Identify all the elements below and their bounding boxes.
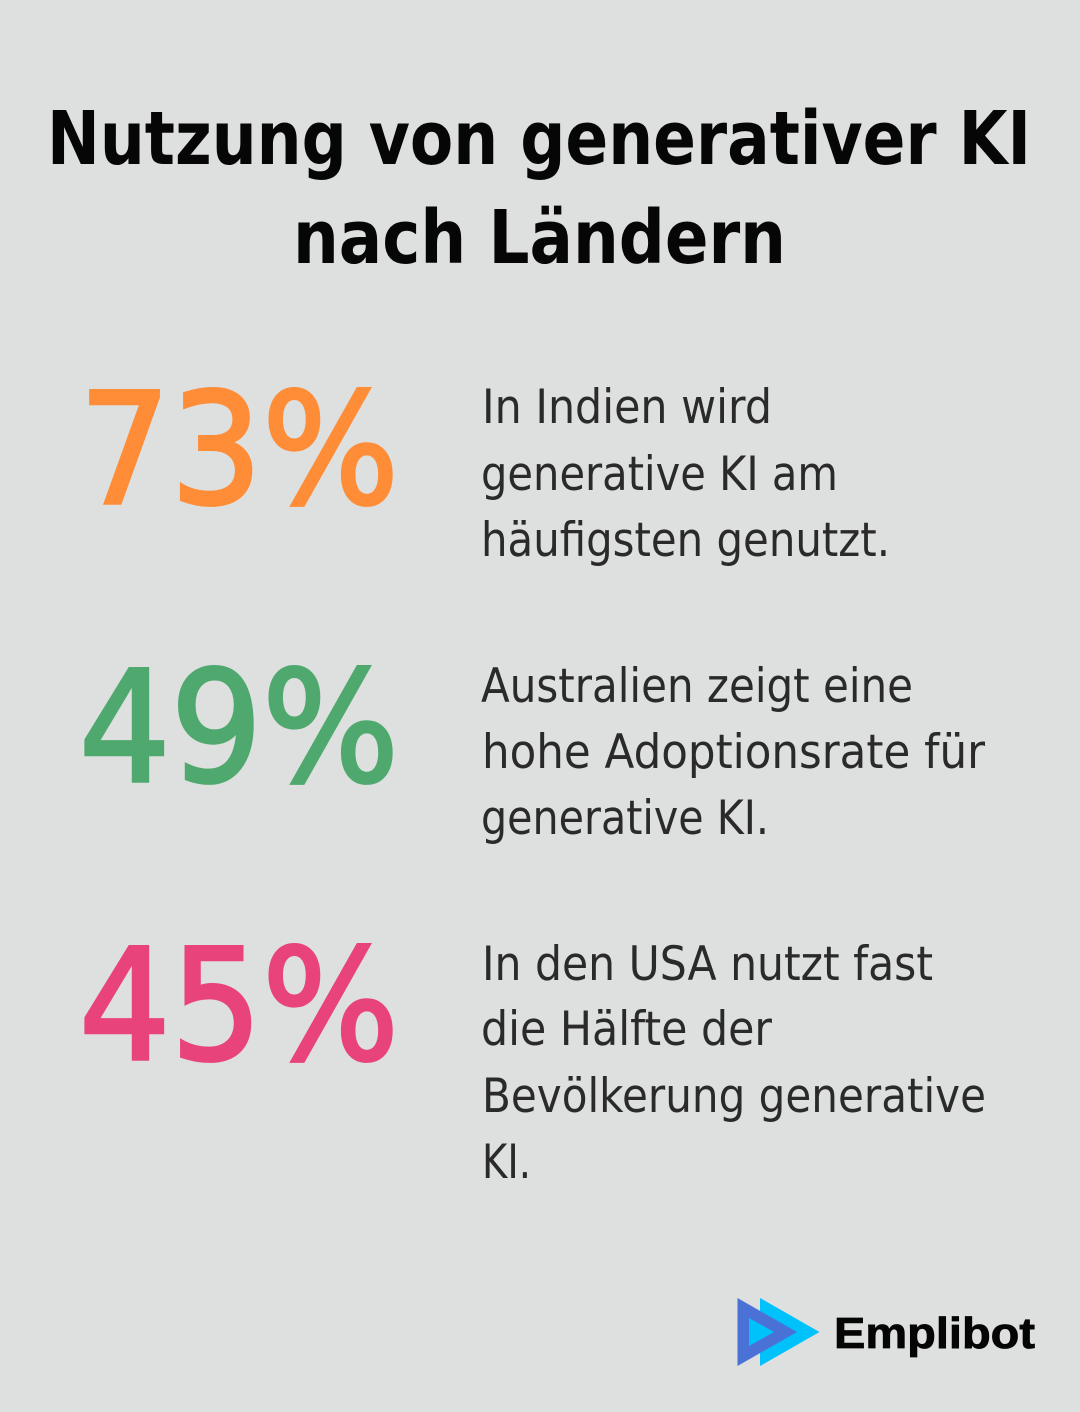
number: 45%: 45% [79, 917, 399, 1096]
text: Australia description [481, 659, 986, 846]
number: 73%: 73% [79, 361, 399, 540]
title: nach Ländern [293, 195, 786, 281]
text: Australia description: Australien zeigt eine [481, 659, 913, 714]
text: USA description: Bevölkerung generative [482, 1069, 986, 1124]
title [47, 96, 1031, 281]
logo: Emplibot [738, 1298, 1035, 1366]
panel: Australia statistic [79, 639, 986, 846]
text: India description: In Indien wird [482, 380, 772, 435]
text: Australia description: hohe Adoptionsrate für [482, 725, 986, 780]
text: India description [481, 380, 890, 568]
icon: play triangles [738, 1298, 820, 1366]
wordmark: Emplibot [834, 1309, 1035, 1358]
panel: USA statistic [79, 917, 986, 1190]
panel: India statistic [79, 361, 890, 568]
text: USA description: KI. [482, 1135, 531, 1190]
number: 49%: 49% [79, 639, 399, 818]
text: India description: häufigsten genutzt. [481, 513, 890, 568]
text: USA description: In den USA nutzt fast [482, 937, 933, 992]
text: USA description [481, 937, 986, 1190]
text: India description: generative KI am [481, 447, 838, 502]
text: USA description: die Hälfte der [481, 1002, 773, 1057]
text: Australia description: generative KI. [481, 791, 769, 846]
